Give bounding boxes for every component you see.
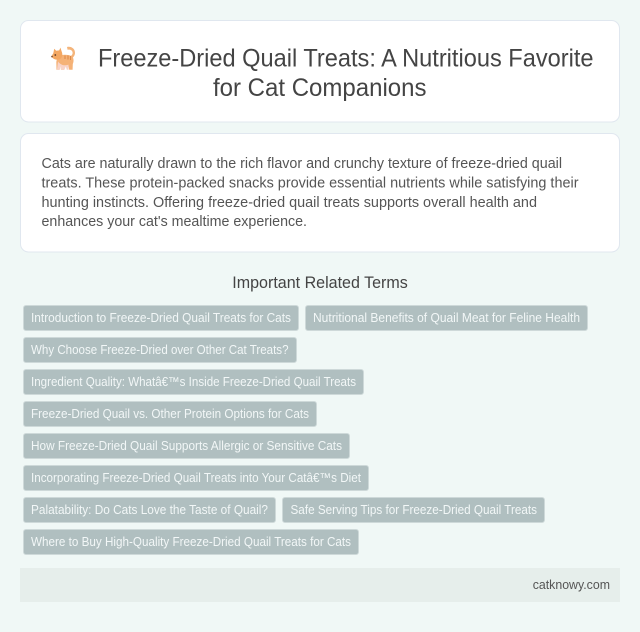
tag: Why Choose Freeze-Dried over Other Cat Treats? — [31, 343, 288, 357]
panel: intro paragraph — [20, 134, 620, 252]
tag: Ingredient Quality: Whatâ€™s Inside Freeze-Dried Quail Treats — [31, 375, 356, 389]
tag list — [24, 306, 588, 554]
panel: intro paragraph: hunting instincts. Offering freeze-dried quail treats supports overall health and — [42, 194, 537, 211]
panel: intro paragraph: Cats are naturally drawn to the rich flavor and crunchy texture of freeze-dried quail — [42, 155, 562, 172]
panel: title card — [20, 20, 620, 122]
tag — [24, 402, 316, 426]
tag: Incorporating Freeze-Dried Quail Treats into Your Catâ€™s Diet — [31, 471, 361, 485]
panel: intro paragraph: enhances your cat's mealtime experience. — [42, 213, 307, 230]
tag — [282, 498, 544, 522]
tag: Safe Serving Tips for Freeze-Dried Quail Treats — [290, 503, 537, 517]
tag: Freeze-Dried Quail vs. Other Protein Options for Cats — [31, 407, 309, 421]
title text: Freeze-Dried Quail Treats: A Nutritious Favorite — [98, 44, 594, 72]
title text: for Cat Companions — [213, 74, 426, 102]
tag — [24, 530, 358, 554]
tag — [24, 370, 364, 394]
tag: Introduction to Freeze-Dried Quail Treats for Cats — [31, 311, 291, 325]
tag — [24, 306, 298, 330]
tag: How Freeze-Dried Quail Supports Allergic or Sensitive Cats — [31, 439, 342, 453]
tag: Palatability: Do Cats Love the Taste of Quail? — [31, 503, 268, 517]
footer bar — [20, 568, 620, 602]
tag — [24, 434, 350, 458]
icon: orange cat — [51, 47, 75, 70]
tag: Where to Buy High-Quality Freeze-Dried Quail Treats for Cats — [31, 535, 351, 549]
heading: important related terms: Important Related Terms — [232, 274, 408, 292]
title text — [98, 44, 594, 102]
panel: intro paragraph: treats. These protein-packed snacks provide essential nutrients while satisfying their — [42, 174, 579, 192]
tag — [24, 498, 276, 522]
tag — [24, 338, 296, 362]
tag — [306, 306, 588, 330]
footer bar: catknowy.com — [533, 577, 610, 592]
tag: Nutritional Benefits of Quail Meat for Feline Health — [313, 311, 580, 325]
tag — [24, 466, 368, 490]
